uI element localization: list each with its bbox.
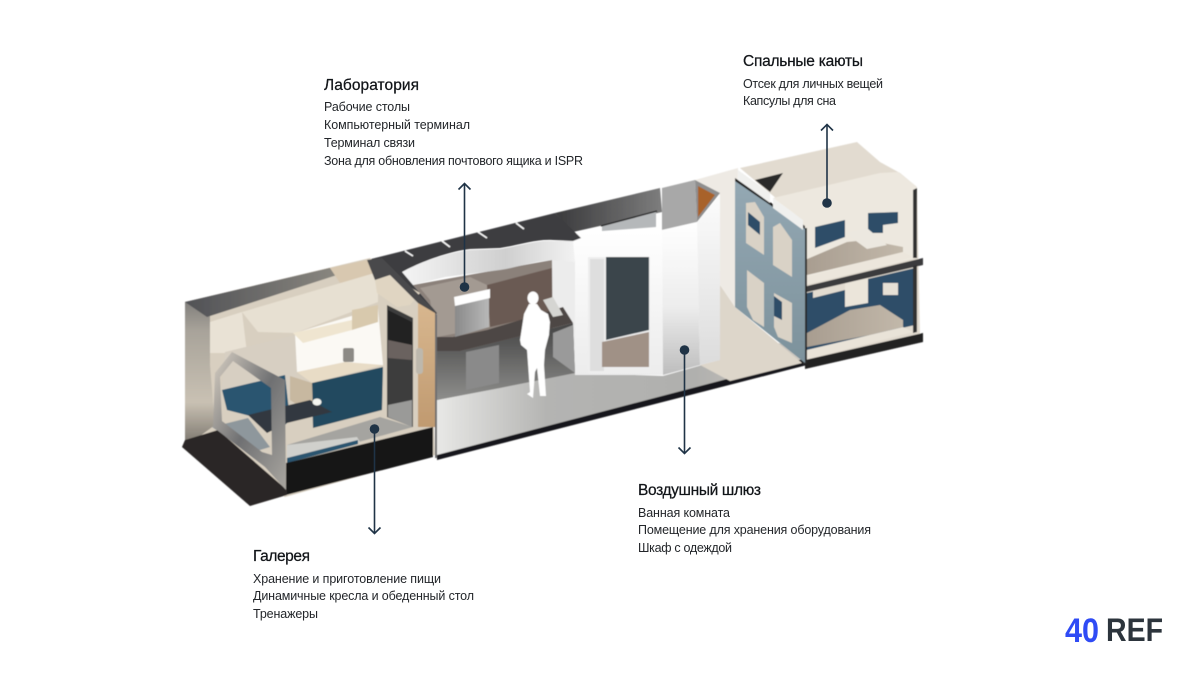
lower bunk bed [807,305,903,347]
text block: laboratory: Рабочие столы [324,100,410,114]
logo: 40REF: REF [1106,612,1163,648]
main floor and base strip [437,285,807,460]
sleeping cabins [740,142,923,369]
desk [437,307,573,351]
black base [286,427,433,495]
teal cabinets [312,367,383,428]
sleeping cabin door panel [735,170,805,363]
text block: laboratory [324,77,583,168]
text block: sleeping cabins: Отсек для личных вещей [743,77,883,91]
hexagonal hatch frame [213,352,286,490]
under-desk shadow [437,323,575,400]
counter [297,362,383,383]
text block: galley: Динамичные кресла и обеденный стол [253,589,474,603]
person silhouette [520,292,550,398]
text block: airlock: Помещение для хранения оборудования [638,523,871,537]
text block: sleeping cabins [743,53,883,108]
dark opening to laboratory [387,305,413,427]
text block: laboratory: Зона для обновления почтового ящика и ISPR [324,154,583,168]
airlock shell [555,180,720,375]
lab equipment [455,290,489,337]
arrow: airlock [678,345,690,454]
text block: laboratory: Терминал связи [324,136,415,150]
logo: 40REF [1065,612,1163,650]
galley floor [287,417,413,462]
arrow: laboratory [458,184,470,292]
text block: sleeping cabins: Капсулы для сна [743,94,836,108]
laboratory interior [367,213,581,400]
dining table [248,400,332,433]
arrow: sleeping cabins [821,124,833,208]
ceiling light band [402,240,575,285]
illustration: habitat module cutaway [182,142,923,506]
text block: galley: Хранение и приготовление пищи [253,572,441,586]
text block: galley: Тренажеры [253,607,318,621]
backsplash [295,308,383,372]
text block: airlock [638,482,871,555]
fold-down table [845,228,887,249]
kettle [343,348,354,362]
tan partition [418,303,435,427]
text block: airlock: Шкаф с одеждой [638,541,732,555]
text block: airlock: Воздушный шлюз [638,482,761,499]
upper bunk bed [805,240,903,275]
text block: laboratory: Лаборатория [324,77,419,94]
text block: galley [253,548,474,621]
text block: galley: Галерея [253,548,310,565]
ceiling [367,213,581,313]
arrow: galley [368,424,380,534]
text block: sleeping cabins: Спальные каюты [743,53,863,70]
text block: laboratory: Компьютерный терминал [324,118,470,132]
partition top box [375,275,420,307]
logo: 40REF: 40 [1065,612,1099,650]
under-desk cabinets [466,345,499,390]
text block: airlock: Ванная комната [638,506,730,520]
galley interior [182,258,437,506]
blue seating [222,375,290,425]
wall behind airlock [695,168,738,307]
